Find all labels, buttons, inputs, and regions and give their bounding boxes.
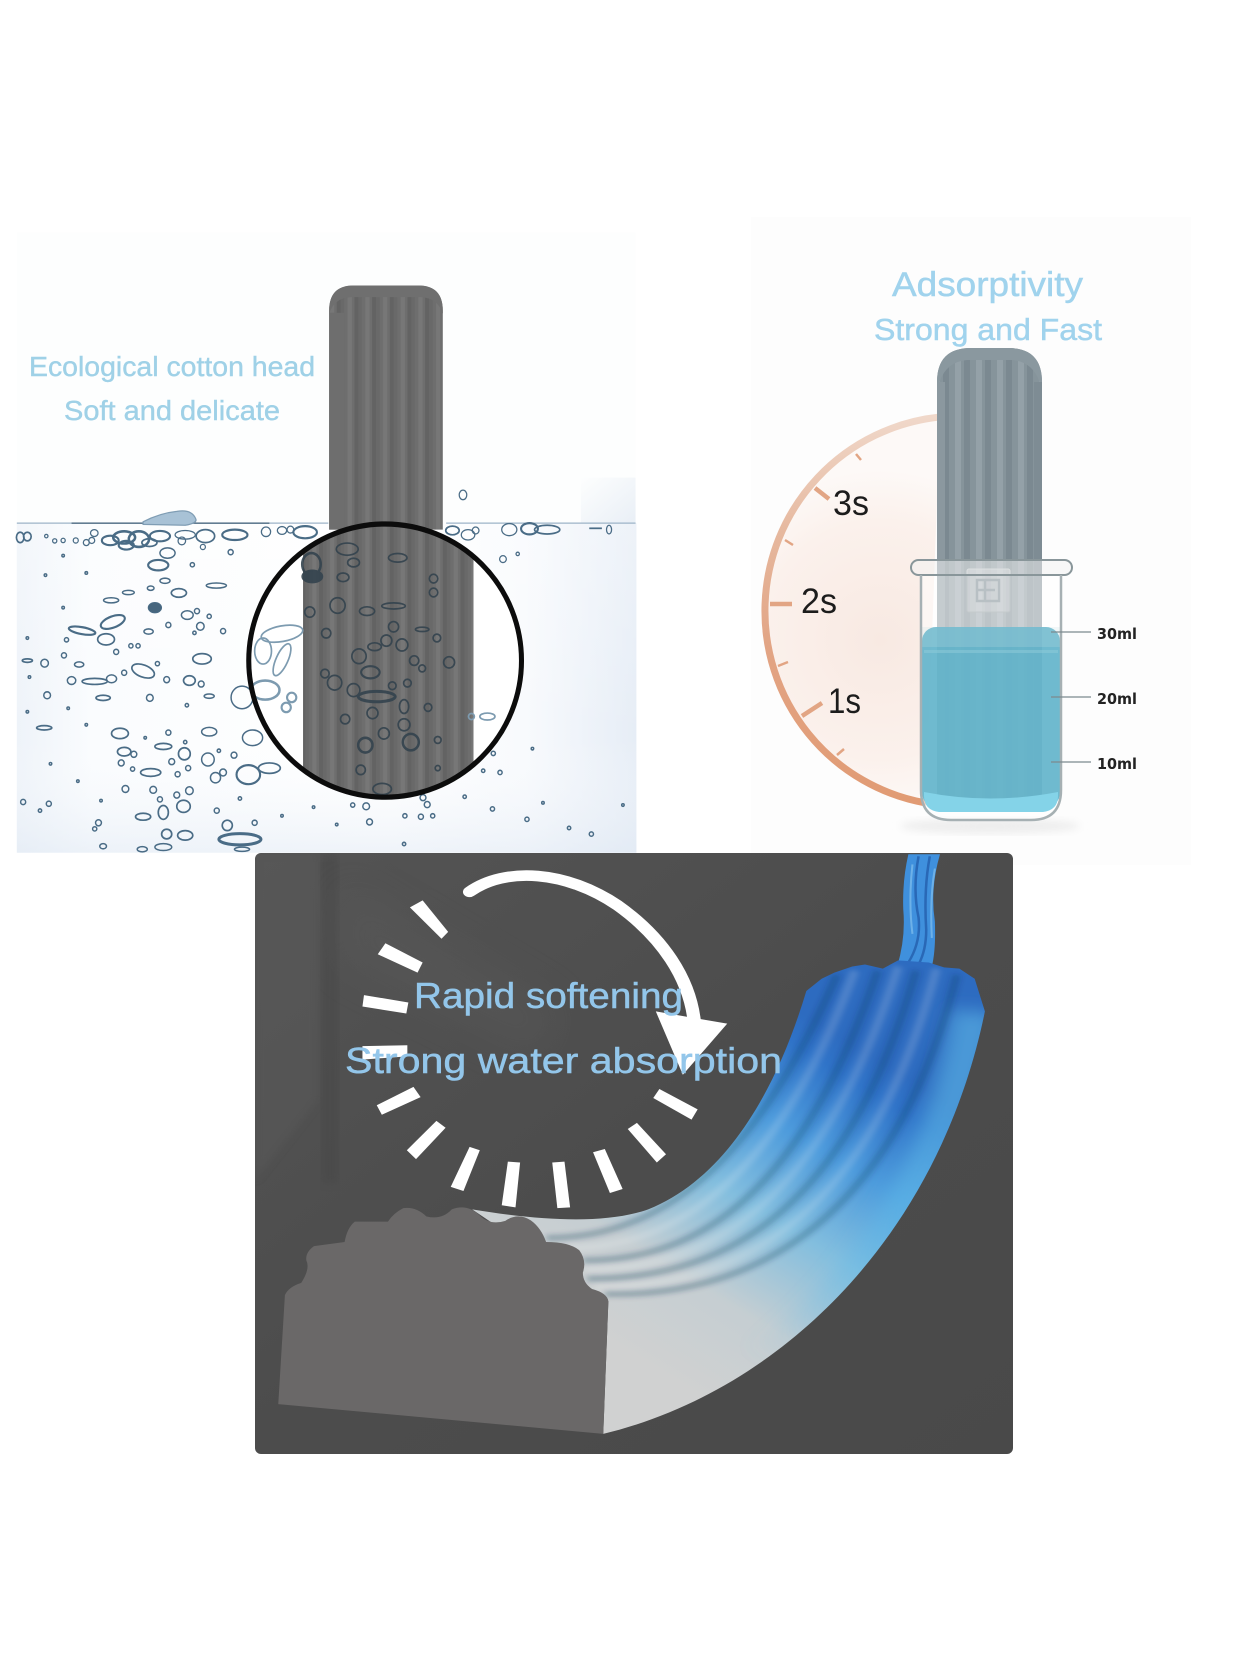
bubbles in water — [21, 548, 624, 852]
cotton head above water — [329, 285, 443, 530]
sponge front cut face — [278, 1207, 608, 1434]
dial with time scale — [765, 417, 940, 803]
heading: adsorptivity: Adsorptivity — [892, 266, 1083, 304]
labels: seconds: 1s — [828, 682, 861, 721]
volume markers: 30ml — [1097, 625, 1137, 643]
volume markers — [1051, 625, 1137, 773]
heading: rapid softening: Rapid softening — [414, 975, 683, 1016]
tick marks around circle — [362, 900, 698, 1208]
heading: rapid softening — [345, 975, 782, 1081]
glass beaker with water — [911, 560, 1072, 820]
magnified circle showing cotton head — [249, 521, 521, 807]
dark panel background — [255, 853, 1013, 1454]
labels: seconds — [801, 484, 869, 721]
panel: rapid softening sponge — [255, 853, 1013, 1454]
heading: ecological cotton head: Ecological cotton head — [29, 351, 315, 382]
volume markers: 10ml — [1097, 755, 1137, 773]
water stream — [897, 854, 940, 967]
panel: adsorptivity beaker — [751, 217, 1191, 865]
water line and foam bubbles — [16, 490, 636, 563]
labels: seconds: 3s — [833, 484, 869, 523]
panel background — [751, 217, 1191, 865]
heading: rapid softening: Strong water absorption — [345, 1040, 782, 1081]
labels: seconds: 2s — [801, 582, 837, 621]
heading: adsorptivity — [874, 266, 1102, 347]
sponge side surface — [472, 960, 985, 1434]
soft shadow under beaker — [900, 818, 1080, 834]
heading: adsorptivity: Strong and Fast — [874, 312, 1102, 347]
heading: ecological cotton head — [29, 351, 315, 426]
panel background — [17, 233, 636, 853]
panel: ecological cotton head in water — [16, 233, 636, 853]
cotton head in beaker — [937, 348, 1042, 808]
volume markers: 20ml — [1097, 690, 1137, 708]
motion arrow — [470, 876, 727, 1075]
heading: ecological cotton head: Soft and delicate — [64, 395, 280, 426]
